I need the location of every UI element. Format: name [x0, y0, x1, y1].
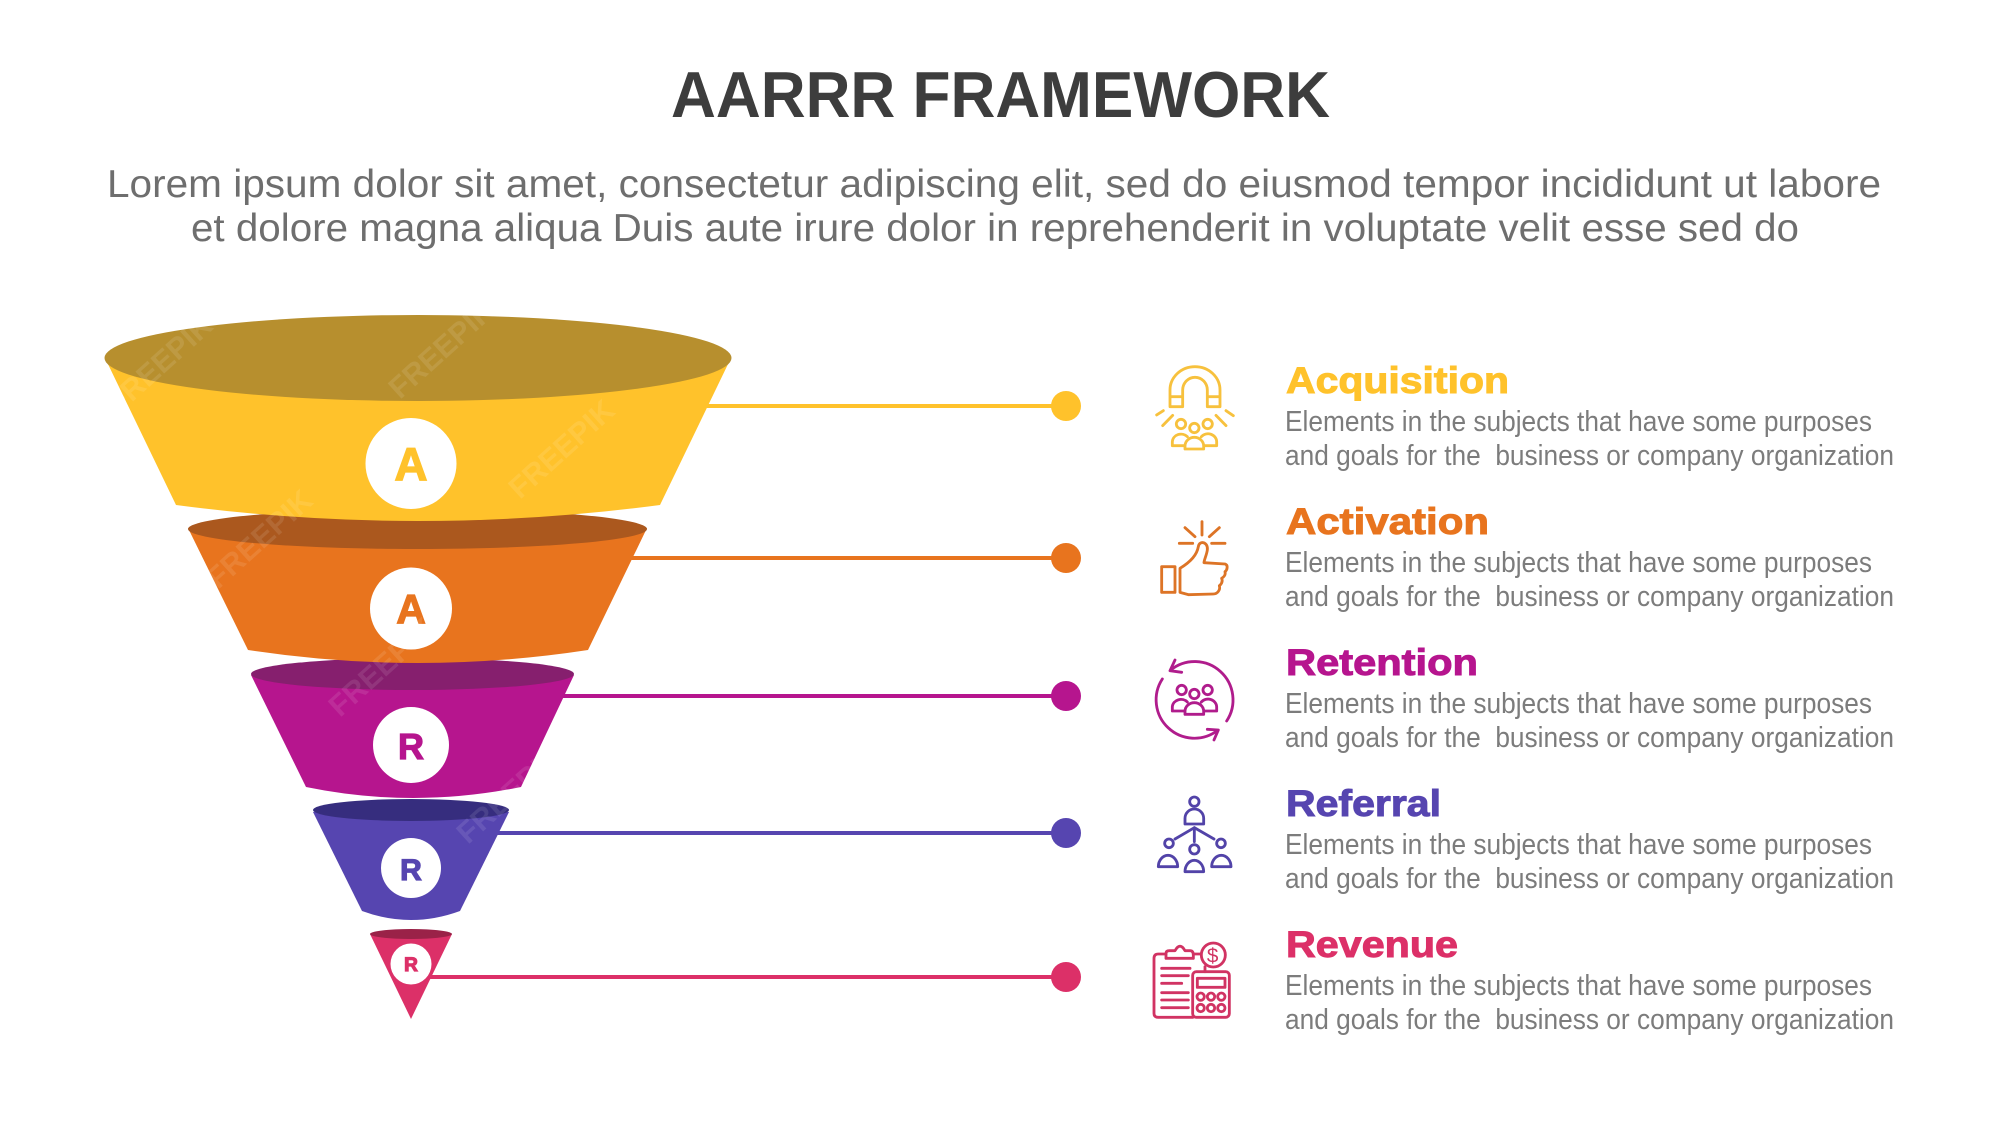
icon: revenue clipboard and calculator: [1154, 943, 1229, 1017]
connector: retention: [540, 681, 1081, 711]
text block: referral: Referral: [1286, 783, 1441, 824]
text block: acquisition: Acquisition: [1286, 360, 1509, 401]
funnel layer 5: revenue: R: [404, 955, 418, 976]
funnel layer 5: revenue: [370, 929, 452, 1019]
watermarks: FREEPIK: [503, 393, 622, 505]
funnel layer 1: acquisition: [104, 315, 732, 521]
text block: activation: [1285, 501, 1894, 613]
funnel layer 4: referral: [313, 799, 509, 920]
watermarks: FREEPIK: [383, 293, 502, 405]
connector: acquisition: [680, 391, 1081, 421]
title: AARRR FRAMEWORK: [671, 58, 1330, 131]
subtitle text block: [107, 163, 1881, 250]
text block: activation: and goals for the business or company organization: [1285, 581, 1894, 613]
connector: referral: [480, 818, 1081, 848]
text block: acquisition: [1285, 360, 1894, 472]
icon: referral network: [1158, 797, 1231, 872]
text block: acquisition: and goals for the business or company organization: [1285, 440, 1894, 472]
funnel chart: [101, 293, 732, 1019]
text block: referral: Elements in the subjects that have some purposes: [1285, 829, 1872, 861]
text block: acquisition: Elements in the subjects that have some purposes: [1285, 406, 1872, 438]
connector: revenue: [420, 962, 1081, 992]
text block: activation: Activation: [1286, 501, 1489, 542]
text block: retention: and goals for the business or company organization: [1285, 722, 1894, 754]
funnel layer 4: referral: R: [400, 854, 422, 887]
watermarks: FREEPIK: [101, 308, 220, 420]
funnel layer 3: retention: R: [398, 726, 424, 767]
connector lines and dots: [420, 391, 1081, 992]
connector: activation: [610, 543, 1081, 573]
funnel layer 2: activation: [188, 509, 647, 663]
text block: retention: Elements in the subjects that have some purposes: [1285, 688, 1872, 720]
subtitle text block: Lorem ipsum dolor sit amet, consectetur adipiscing elit, sed do eiusmod tempor incididunt ut labore: [107, 163, 1881, 206]
watermarks: FREEPIK: [201, 483, 320, 595]
text block: referral: and goals for the business or company organization: [1285, 863, 1894, 895]
funnel layer 2: activation: A: [396, 586, 426, 632]
watermarks: FREEPIK: [323, 611, 442, 723]
text block: retention: [1285, 642, 1894, 754]
text block: referral: [1285, 783, 1894, 895]
icon: magnet attracting people: [1157, 367, 1233, 449]
subtitle text block: et dolore magna aliqua Duis aute irure dolor in reprehenderit in voluptate velit esse sed do: [191, 207, 1799, 250]
watermarks: FREEPIK: [451, 738, 570, 850]
icon: revenue clipboard and calculator: $: [1207, 945, 1219, 968]
text block: retention: Retention: [1286, 642, 1478, 683]
text block: revenue: Elements in the subjects that have some purposes: [1285, 970, 1872, 1002]
funnel layer 3: retention: [251, 658, 574, 798]
icon: retention cycle: [1156, 660, 1233, 740]
text block: revenue: and goals for the business or company organization: [1285, 1004, 1894, 1036]
watermarks: [101, 293, 622, 850]
text block: activation: Elements in the subjects that have some purposes: [1285, 547, 1872, 579]
funnel layer 1: acquisition: A: [394, 438, 428, 490]
icon: thumbs up: [1162, 522, 1227, 595]
text block: revenue: [1285, 924, 1894, 1036]
text block: revenue: Revenue: [1286, 924, 1458, 965]
